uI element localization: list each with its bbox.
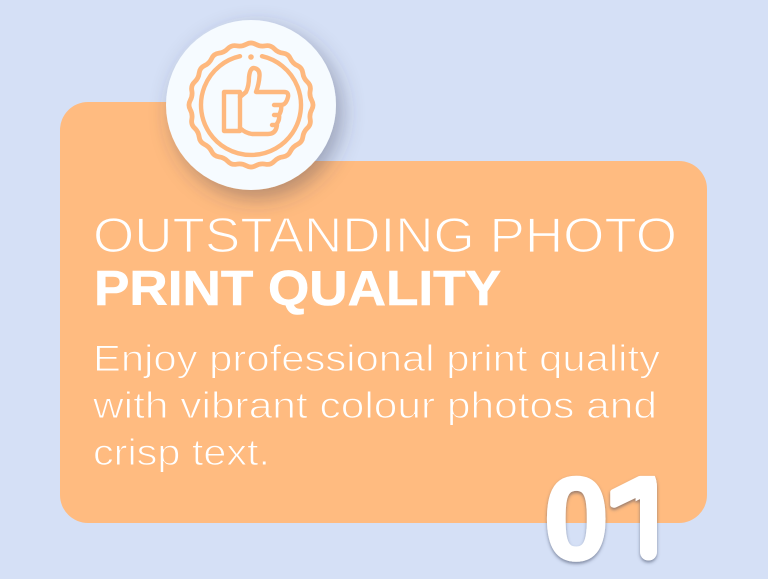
icon: inner ring [201, 56, 301, 155]
icon: wavy seal outline [189, 43, 313, 167]
heading line 2: PRINT QUALITY [94, 262, 501, 316]
body line 1: Enjoy professional print quality [93, 338, 661, 379]
panel: orange stepped card [60, 102, 707, 523]
body text [92, 338, 661, 473]
icon: thumbs up badge [166, 20, 336, 190]
icon: ring dot [248, 54, 254, 60]
icon background circle [166, 20, 336, 190]
number 01 [544, 476, 660, 566]
heading [93, 209, 677, 316]
heading line 1: OUTSTANDING PHOTO [93, 209, 677, 263]
body line 3: crisp text. [93, 432, 270, 473]
icon: hand [240, 68, 288, 134]
body line 2: with vibrant colour photos and [92, 385, 657, 426]
icon: thumb cuff [224, 92, 240, 131]
